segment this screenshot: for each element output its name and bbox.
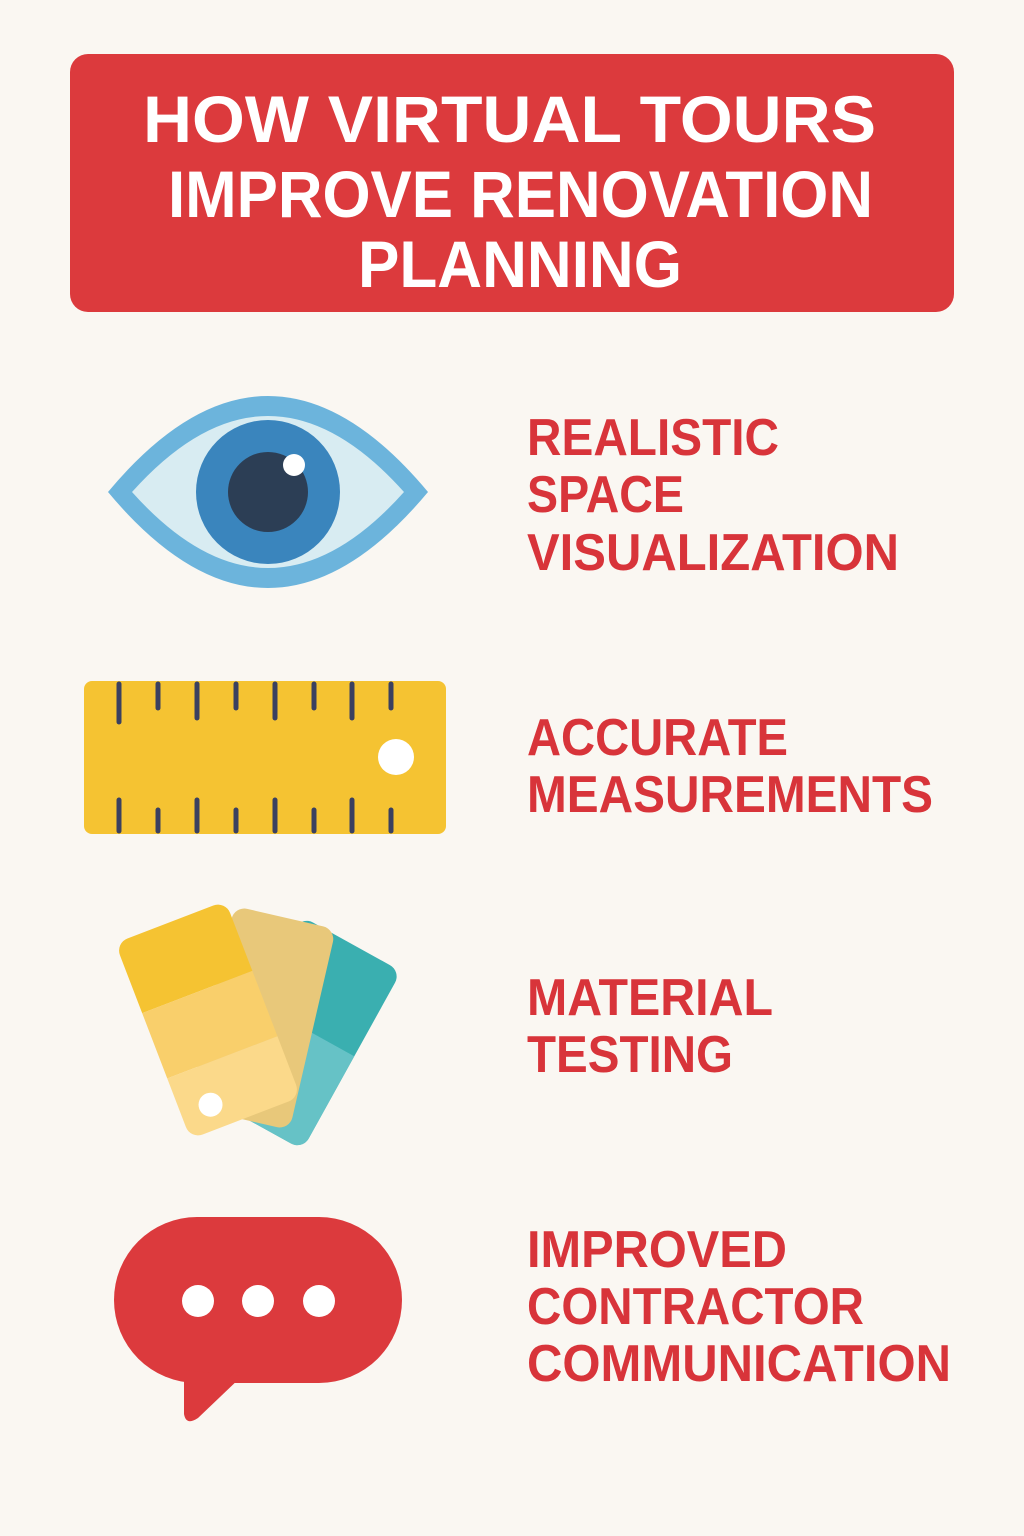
title banner: IMPROVE RENOVATION — [168, 157, 873, 231]
label: improved contractor communication: COMMUNICATION — [527, 1335, 951, 1393]
label: realistic space visualization: VISUALIZATION — [527, 524, 899, 582]
label: accurate measurements: MEASUREMENTS — [527, 766, 933, 824]
title banner: HOW VIRTUAL TOURS — [143, 82, 876, 156]
label: realistic space visualization — [527, 409, 899, 582]
title banner — [70, 54, 954, 312]
label: material testing — [527, 969, 773, 1084]
icon: eye — [108, 396, 428, 588]
label: improved contractor communication: CONTRACTOR — [527, 1278, 864, 1336]
label: accurate measurements: ACCURATE — [527, 709, 788, 767]
label: material testing: MATERIAL — [527, 969, 773, 1027]
title banner: PLANNING — [358, 227, 682, 301]
label: accurate measurements — [527, 709, 933, 824]
icon: swatches — [119, 904, 397, 1146]
label: improved contractor communication: IMPROVED — [527, 1221, 787, 1279]
label: improved contractor communication — [527, 1221, 951, 1393]
label: realistic space visualization: SPACE — [527, 466, 684, 524]
label: realistic space visualization: REALISTIC — [527, 409, 779, 467]
icon: ruler — [84, 681, 446, 834]
icon: speech bubble — [114, 1217, 402, 1421]
label: material testing: TESTING — [527, 1026, 733, 1084]
